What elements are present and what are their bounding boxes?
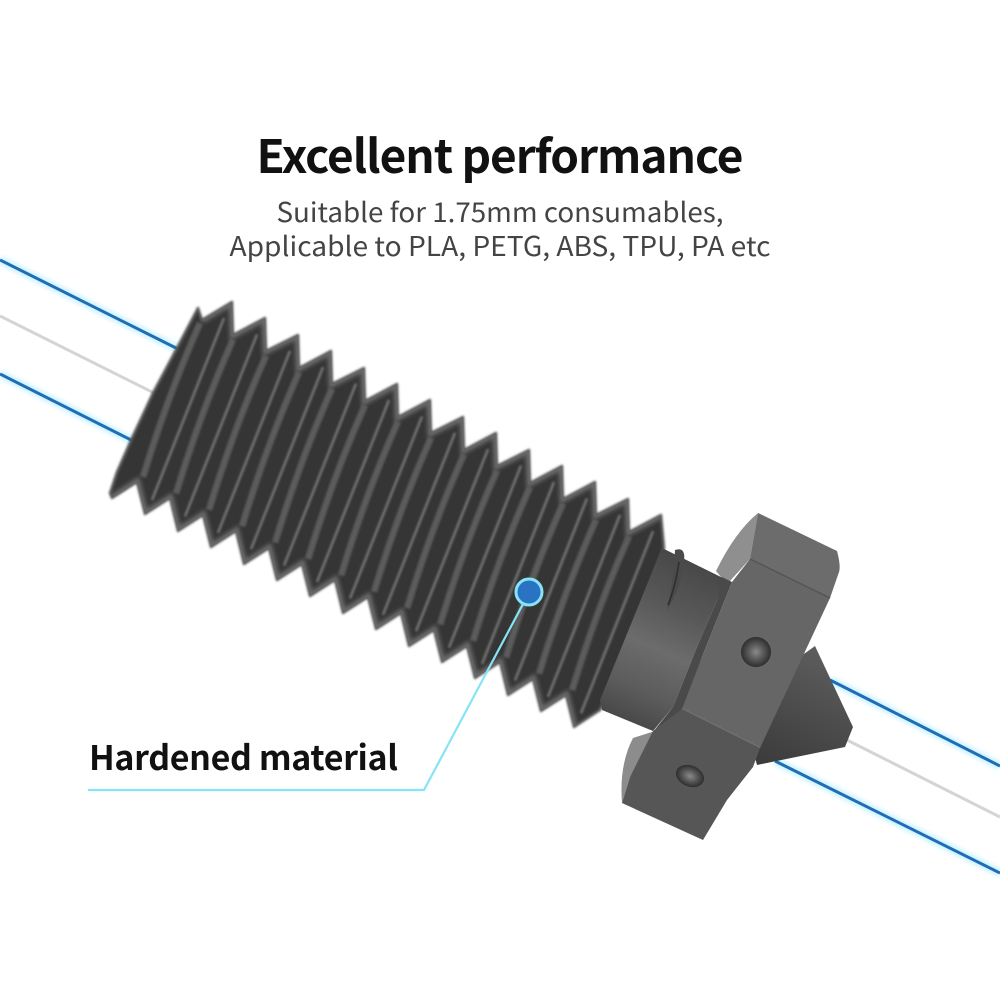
cone tip — [740, 646, 853, 765]
title: Excellent performance — [256, 121, 744, 187]
icon: screw hole lower — [673, 761, 707, 791]
callout: hardened material — [88, 579, 542, 790]
hex flange — [621, 513, 840, 840]
icon: screw hole upper — [741, 637, 771, 667]
leader line — [88, 604, 523, 790]
neck — [600, 548, 723, 731]
subtitle: Applicable to PLA, PETG, ABS, TPU, PA etc — [230, 225, 770, 264]
marker dot — [516, 579, 542, 605]
subtitle — [230, 191, 770, 264]
threaded body — [110, 302, 664, 727]
main face — [682, 559, 830, 748]
lower face — [622, 709, 760, 840]
dark chamfer — [653, 577, 732, 732]
subtitle: Suitable for 1.75mm consumables, — [276, 191, 724, 230]
label: Hardened material — [89, 731, 398, 780]
nozzle — [110, 302, 853, 840]
lower bevel — [621, 731, 655, 803]
upper bevel — [716, 513, 758, 582]
filament lines — [0, 260, 1000, 873]
top face — [750, 513, 840, 598]
